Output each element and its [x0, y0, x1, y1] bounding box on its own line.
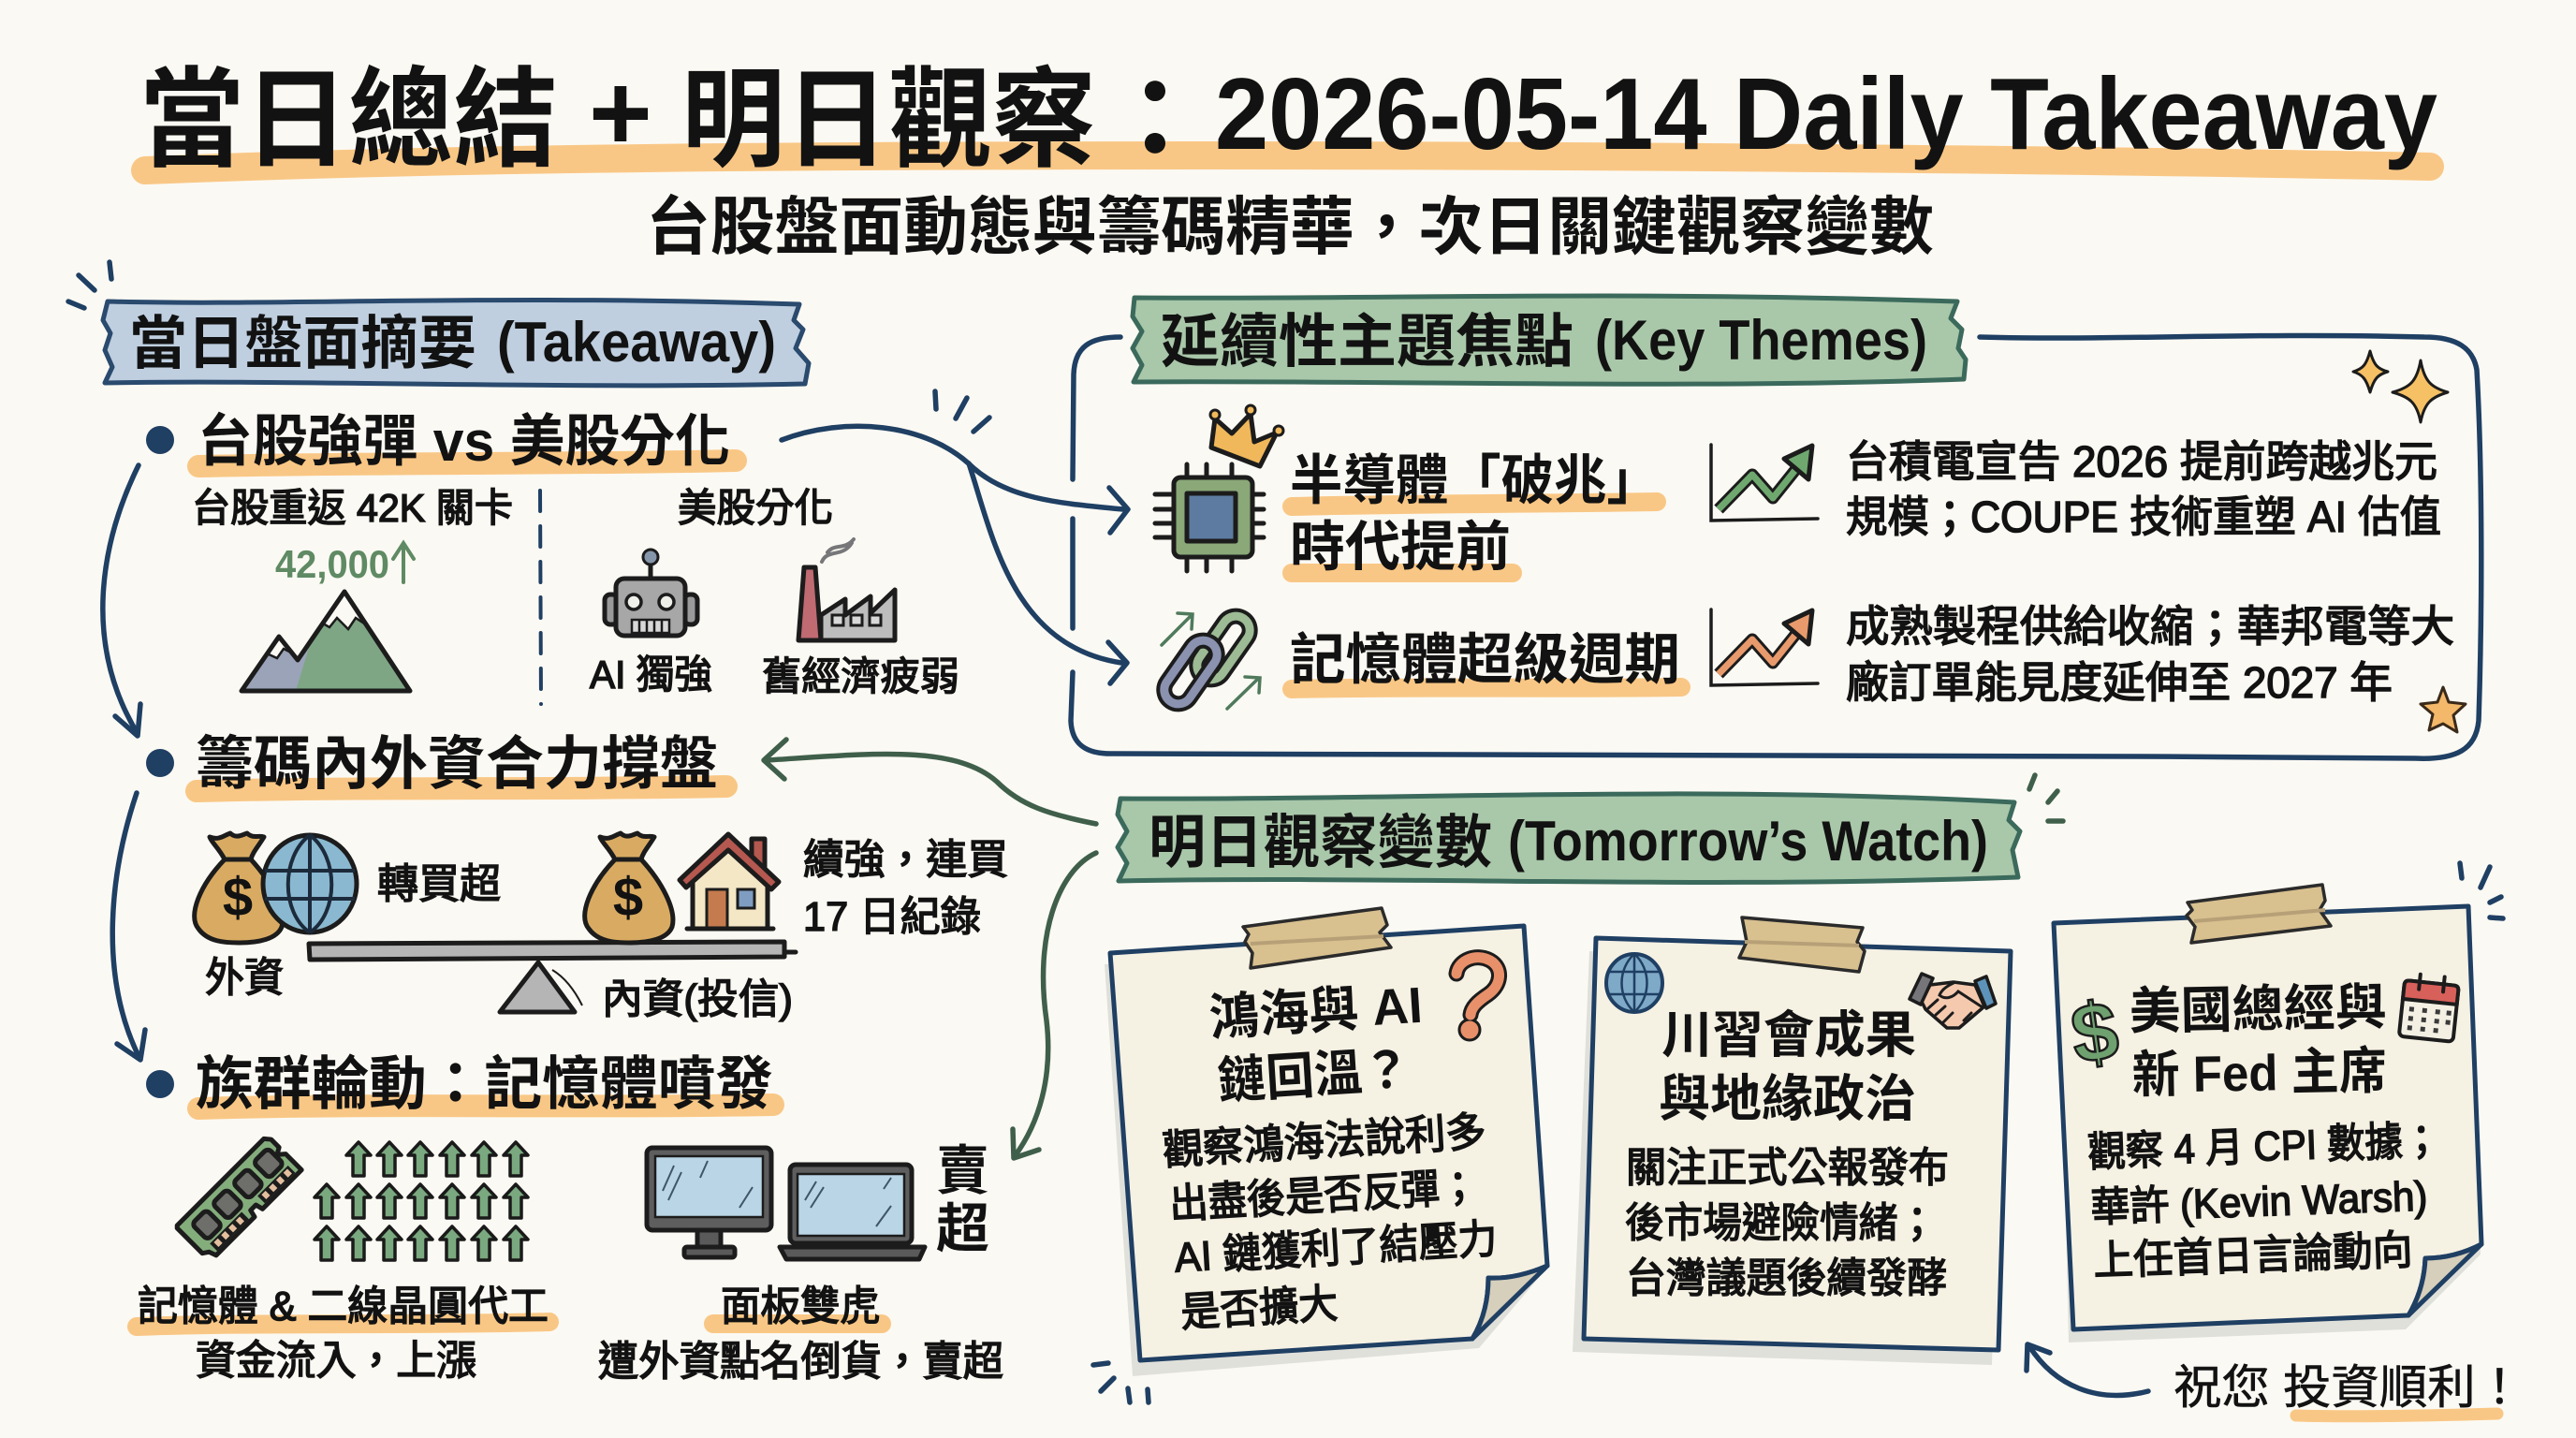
- label: AI 獨強: AI 獨強: [590, 653, 712, 697]
- icon: chip: [1155, 464, 1264, 571]
- label: 資金流入: 資金流入，上漲: [196, 1338, 476, 1384]
- label: 內資(投信): 內資(投信): [602, 976, 793, 1022]
- label: 美股分化: 美股分化: [678, 486, 833, 530]
- note body: 是否擴大: [1179, 1281, 1339, 1336]
- arrow: bullet 2 to bullet 3: [112, 793, 145, 1060]
- note body: 觀察 4 月 CPI 數據；: [2087, 1118, 2441, 1176]
- icon: question mark: [1456, 958, 1500, 1040]
- label: 面板雙虎: 面板雙虎: [721, 1284, 880, 1329]
- icon: star: [2421, 687, 2466, 732]
- spark marks: arrow: [935, 391, 989, 432]
- label: 舊經濟疲弱: 舊經濟疲弱: [762, 654, 959, 698]
- label: 半導體破兆: [1290, 450, 1660, 578]
- label: 轉買超: 轉買超: [377, 861, 501, 907]
- icon: robot: [605, 550, 697, 636]
- text: TSMC: [1846, 437, 2441, 541]
- icon: globe: [263, 835, 357, 932]
- title: 2026-05-14 Daily Takeaway: [1215, 57, 2437, 171]
- banner: tomorrow's watch: [1118, 794, 2020, 882]
- arrow: watch to 賣超: [1013, 853, 1096, 1158]
- panel: note US macro: [2054, 885, 2481, 1343]
- bullet: 台股強彈: 台股強彈 vs 美股分化: [198, 410, 730, 473]
- note heading: [1208, 977, 1428, 1110]
- bullet: 族群輪動: 族群輪動：記憶體噴發: [196, 1052, 773, 1117]
- title: ：: [1101, 59, 1209, 181]
- tape: [1243, 908, 1391, 968]
- icon: chain: [1159, 610, 1260, 710]
- banner: takeaway: 當日盤面摘要: [129, 312, 476, 376]
- note heading: [2129, 979, 2387, 1104]
- icon: sparkles: [2353, 351, 2448, 422]
- spark marks: tomorrow banner: [2029, 775, 2063, 821]
- icon: house: [680, 834, 779, 929]
- icon: memory module: [176, 1136, 301, 1261]
- arrow: bullet 1 to bullet 2: [103, 465, 140, 736]
- title: [139, 51, 2437, 181]
- banner: key themes: 延續性主題焦點: [1161, 310, 1573, 374]
- label: 17 日紀錄: 17 日紀錄: [803, 894, 981, 940]
- note body: 關注正式公報發布: [1626, 1145, 1949, 1191]
- label: 記憶體超級週期: 記憶體超級週期: [1290, 629, 1680, 691]
- label: 遭外資點名倒貨: 遭外資點名倒貨，賣超: [598, 1339, 1003, 1385]
- tape: [2187, 885, 2331, 943]
- note body: [1625, 1145, 1949, 1301]
- icon: monitor: [647, 1148, 771, 1257]
- text: memory supply: 成熟製程供給收縮；華邦電等大: [1846, 602, 2454, 651]
- note body: 後市場避險情緒；: [1625, 1200, 1937, 1246]
- icon: chart rising orange: [1711, 609, 1818, 685]
- bullet: 籌碼: 籌碼內外資合力撐盤: [196, 732, 718, 797]
- text: TSMC: 台積電宣告 2026 提前跨越兆元: [1846, 437, 2437, 486]
- text: TSMC: 規模；COUPE 技術重塑 AI 估值: [1846, 492, 2441, 541]
- arrow: takeaway to semiconductors: [782, 426, 1128, 533]
- icon: chart rising green: [1711, 445, 1818, 521]
- spark marks: takeaway banner: [68, 262, 111, 308]
- panel: note Trump-Xi: [1573, 917, 2011, 1365]
- arrow: watch to 籌碼: [764, 740, 1096, 824]
- panel: note Foxconn: [1105, 908, 1547, 1376]
- label: 賣超 vertical: [936, 1141, 989, 1259]
- title: +: [589, 51, 652, 173]
- label: 台股重返: 台股重返 42K 關卡: [192, 486, 513, 530]
- banner: key themes: [1133, 296, 1966, 384]
- label: 外資: 外資: [205, 955, 284, 1001]
- note heading: 川習會成果: [1661, 1007, 1916, 1064]
- icon: factory: [798, 539, 895, 640]
- banner: tomorrow's watch: 明日觀察變數: [1149, 811, 1492, 875]
- note heading: 鴻海與 AI: [1208, 977, 1424, 1047]
- note heading: 鏈回溫？: [1216, 1042, 1412, 1110]
- icon: crown: [1210, 405, 1283, 466]
- note heading: 與地緣政治: [1659, 1071, 1916, 1127]
- dashed divider: [540, 491, 541, 704]
- label: 半導體破兆: 半導體「破兆」: [1290, 450, 1660, 511]
- note body: [2087, 1118, 2441, 1284]
- note body: [1162, 1108, 1501, 1337]
- arrow: closing to notes: [2027, 1344, 2148, 1395]
- text: memory supply: [1846, 602, 2454, 707]
- label: 半導體破兆: 時代提前: [1290, 517, 1511, 578]
- panel: key themes frame: [1071, 335, 2481, 758]
- label: 42,000 up: 42,000: [275, 542, 389, 586]
- icon: laptop: [780, 1165, 925, 1259]
- subtitle: 台股盤面動態與籌碼精華，次日關鍵觀察變數: [646, 192, 1934, 263]
- icon: foreign money bag: $: [223, 867, 253, 928]
- note body: 出盡後是否反彈；: [1168, 1164, 1479, 1228]
- icon: handshake: [1910, 974, 1996, 1028]
- icon: scale: [309, 942, 796, 1012]
- label: 賣超 vertical: 超: [936, 1199, 989, 1259]
- banner: key themes: (Key Themes): [1595, 309, 1927, 372]
- note heading: 美國總經與: [2129, 979, 2387, 1040]
- icon: dollar sign: $: [2066, 983, 2124, 1081]
- note body: 上任首日言論動向: [2093, 1227, 2413, 1284]
- banner: takeaway: [103, 300, 809, 386]
- spark marks: note 3: [2460, 863, 2503, 918]
- note heading: [1659, 1007, 1916, 1127]
- note body: 華許 (Kevin Warsh): [2090, 1173, 2428, 1231]
- icon: domestic money bag: [585, 833, 673, 943]
- label: 續強: 續強，連買: [803, 837, 1008, 883]
- note heading: 新 Fed 主席: [2131, 1043, 2387, 1104]
- banner: tomorrow's watch: (Tomorrow’s Watch): [1508, 810, 1988, 873]
- text: memory supply: 廠訂單能見度延伸至 2027 年: [1846, 658, 2393, 707]
- banner: takeaway: (Takeaway): [497, 311, 776, 374]
- note body: 台灣議題後續發酵: [1626, 1255, 1947, 1301]
- spark marks: note 1: [1093, 1363, 1149, 1402]
- icon: calendar: [2399, 973, 2460, 1042]
- icon: rising arrows: [315, 1142, 528, 1260]
- icon: foreign money bag: [195, 833, 283, 943]
- icon: mountain: [242, 592, 410, 691]
- icon: domestic money bag: $: [613, 867, 643, 928]
- closing message: 祝您 投資順利！: [2174, 1361, 2524, 1414]
- arrow: takeaway to memory: [969, 463, 1127, 683]
- title: 當日總結: [139, 59, 558, 181]
- tape: [1739, 917, 1865, 972]
- note body: 觀察鴻海法說利多: [1162, 1109, 1487, 1174]
- title: 明日觀察: [681, 59, 1096, 181]
- label: 記憶體 & 二線晶圓代工: 記憶體 & 二線晶圓代工: [138, 1284, 549, 1329]
- note body: AI 鏈獲利了結壓力: [1173, 1216, 1499, 1281]
- icon: globe: [1606, 954, 1662, 1012]
- label: 賣超 vertical: 賣: [936, 1141, 989, 1201]
